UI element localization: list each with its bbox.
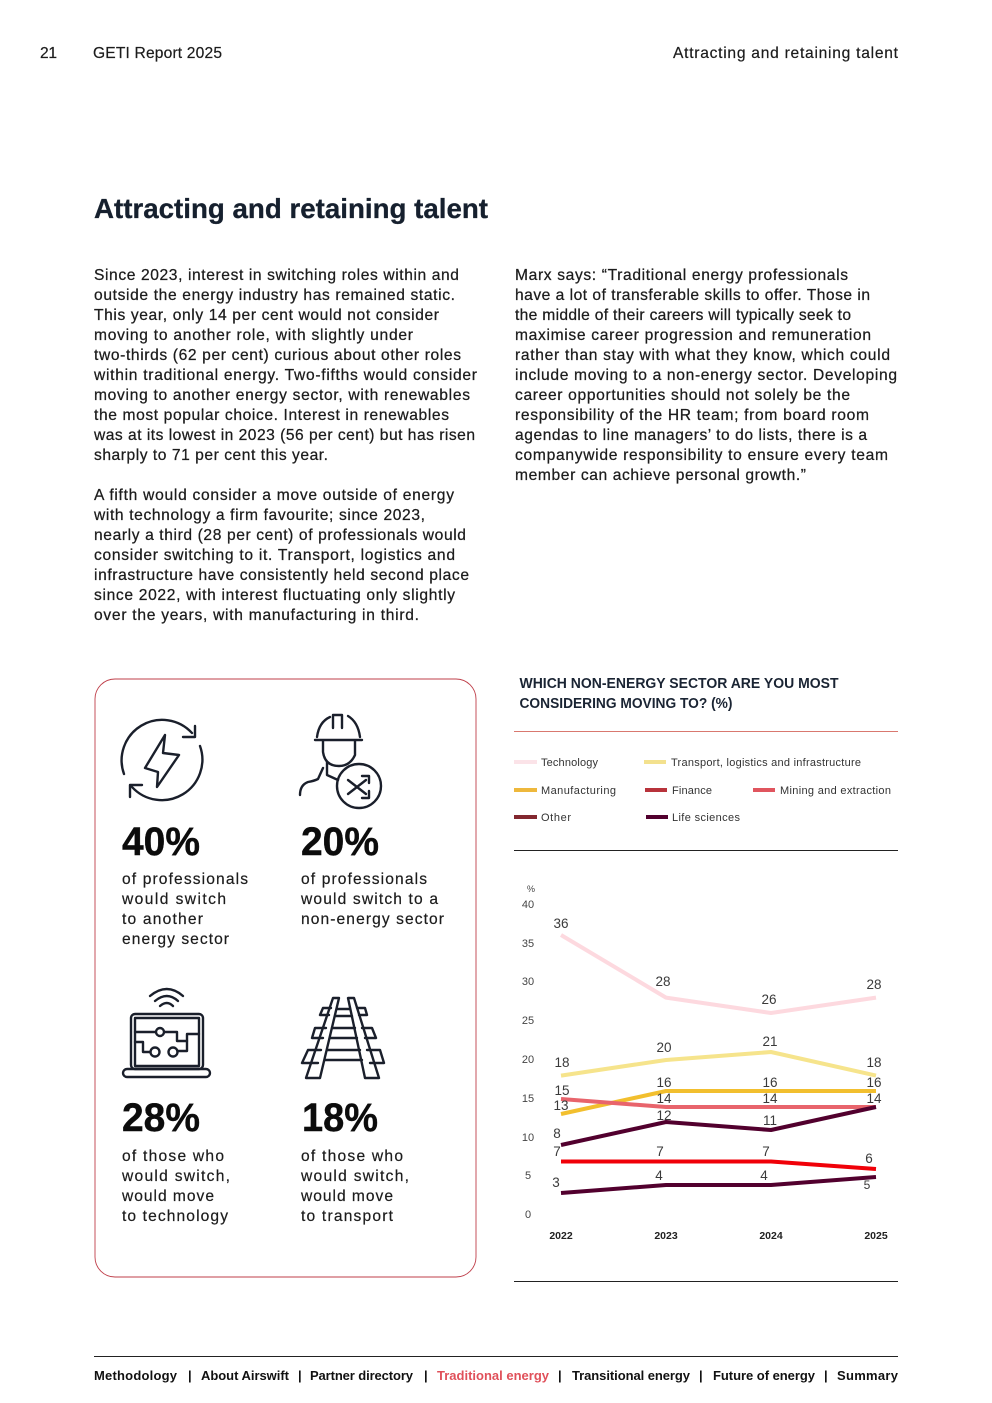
- text block: right column quote: maximise career progression and remuneration: [515, 327, 871, 344]
- stat: 28 per cent: would switch,: [121, 1168, 230, 1185]
- series: manufacturing: [561, 1091, 876, 1114]
- footer navigation: |: [699, 1368, 703, 1383]
- page header: GETI Report 2025: [93, 45, 222, 62]
- text block: left column: consider switching to it. Transport, logistics and: [94, 547, 455, 564]
- text block: right column quote: Marx says: “Traditional energy professionals: [515, 267, 848, 284]
- text block: left column: [93, 267, 477, 624]
- chart heading: CONSIDERING MOVING TO? (%): [520, 696, 733, 712]
- data labels: 7: [762, 1144, 770, 1159]
- text block: right column quote: rather than stay with what they know, which could: [515, 347, 890, 364]
- text block: left column: Since 2023, interest in switching roles within and: [94, 267, 459, 284]
- footer navigation: Methodology: [94, 1368, 178, 1383]
- data labels: 18: [866, 1055, 882, 1070]
- stat: 40 per cent: to another: [122, 911, 203, 928]
- stat: 18 per cent: 18%: [302, 1096, 378, 1140]
- data labels: [552, 916, 882, 1192]
- text block: left column: with technology a firm favourite; since 2023,: [93, 507, 425, 524]
- footer navigation: Future of energy: [713, 1368, 816, 1383]
- data labels: 15: [554, 1083, 570, 1098]
- y axis labels: %: [527, 884, 535, 894]
- text block: left column: since 2022, with interest fluctuating only slightly: [94, 587, 455, 604]
- text block: right column quote: career opportunities should not solely be the: [515, 387, 850, 404]
- text block: left column: A fifth would consider a move outside of energy: [94, 487, 454, 504]
- y axis labels: 20: [522, 1054, 534, 1066]
- footer navigation: Partner directory: [310, 1368, 414, 1383]
- y axis labels: 30: [522, 976, 534, 988]
- line chart: [522, 884, 888, 1242]
- footer navigation: |: [424, 1368, 428, 1383]
- data labels: 12: [656, 1108, 672, 1123]
- y axis labels: 0: [525, 1209, 531, 1221]
- text block: right column quote: responsibility of the HR team; from board room: [515, 407, 869, 424]
- footer navigation: Summary: [837, 1368, 899, 1383]
- data labels: 3: [552, 1175, 560, 1190]
- stat: 28 per cent: [121, 1096, 230, 1225]
- data labels: 6: [865, 1151, 873, 1166]
- stat: 20 per cent: [300, 820, 444, 928]
- y axis labels: 25: [522, 1015, 534, 1027]
- x axis labels: [549, 1230, 888, 1242]
- chart legend: Other: [541, 812, 571, 824]
- footer navigation: |: [558, 1368, 562, 1383]
- chart legend: Transport, logistics and infrastructure: [671, 757, 861, 769]
- y axis labels: 5: [525, 1170, 531, 1182]
- stat: 18 per cent: would move: [300, 1188, 393, 1205]
- data labels: 18: [554, 1055, 570, 1070]
- stat: 40 per cent: of professionals: [122, 871, 248, 888]
- data labels: 4: [655, 1168, 663, 1183]
- series: mining and extraction: [561, 1099, 876, 1107]
- y axis labels: 40: [522, 899, 534, 911]
- data labels: 13: [553, 1098, 569, 1113]
- footer navigation: |: [824, 1368, 828, 1383]
- stat: 20 per cent: of professionals: [301, 871, 427, 888]
- text block: right column quote: have a lot of transferable skills to offer. Those in: [515, 287, 870, 304]
- data labels: 16: [866, 1075, 882, 1090]
- data labels: 5: [864, 1178, 871, 1192]
- data labels: 7: [553, 1144, 561, 1159]
- chart legend: Mining and extraction: [780, 785, 891, 797]
- data labels: 16: [762, 1075, 778, 1090]
- text block: left column: infrastructure have consistently held second place: [94, 567, 469, 584]
- chart legend: Manufacturing: [541, 785, 616, 797]
- text block: left column: the most popular choice. Interest in renewables: [94, 407, 449, 424]
- series: technology: [561, 935, 876, 1013]
- series: finance: [561, 1162, 876, 1169]
- data labels: 28: [866, 977, 882, 992]
- text block: right column quote: [515, 267, 897, 484]
- data labels: 4: [760, 1168, 768, 1183]
- stat: 18 per cent: to transport: [301, 1208, 394, 1225]
- stat: 28 per cent: 28%: [122, 1096, 200, 1140]
- icon: worker switching: [300, 715, 381, 808]
- icon: railway track: [302, 998, 384, 1078]
- data labels: 36: [553, 916, 569, 931]
- text block: left column: outside the energy industry has remained static.: [94, 287, 455, 304]
- data labels: 16: [656, 1075, 672, 1090]
- text block: right column quote: companywide responsibility to ensure every team: [515, 447, 888, 464]
- page header: [40, 45, 899, 62]
- text block: left column: moving to another role, with slightly under: [94, 327, 413, 344]
- text block: right column quote: member can achieve personal growth.”: [515, 467, 806, 484]
- stat: 28 per cent: of those who: [122, 1148, 224, 1165]
- y axis labels: 35: [522, 938, 534, 950]
- page header: 21: [40, 45, 57, 62]
- data labels: 8: [553, 1126, 561, 1141]
- stat: 18 per cent: [300, 1096, 409, 1225]
- text block: left column: This year, only 14 per cent would not consider: [94, 307, 439, 324]
- stat: 20 per cent: would switch to a: [300, 891, 438, 908]
- footer navigation: Transitional energy: [572, 1368, 691, 1383]
- panel: key statistics: [95, 679, 476, 1277]
- stat: 20 per cent: 20%: [301, 820, 379, 864]
- footer navigation: |: [298, 1368, 302, 1383]
- chart legend: Life sciences: [672, 812, 740, 824]
- chart heading: [520, 676, 839, 712]
- title: Attracting and retaining talent: [94, 193, 488, 224]
- series: life sciences upper: [561, 1107, 876, 1145]
- text block: left column: two-thirds (62 per cent) curious about other roles: [94, 347, 461, 364]
- data labels: 14: [762, 1091, 778, 1106]
- y axis labels: 15: [522, 1093, 534, 1105]
- footer navigation: |: [188, 1368, 192, 1383]
- stat: 20 per cent: non-energy sector: [301, 911, 444, 928]
- chart legend: [514, 757, 891, 824]
- text block: right column quote: include moving to a non-energy sector. Developing: [515, 367, 897, 384]
- footer navigation: About Airswift: [201, 1368, 290, 1383]
- x axis labels: 2025: [864, 1230, 888, 1242]
- stat: 40 per cent: energy sector: [122, 931, 229, 948]
- stat: 40 per cent: would switch: [121, 891, 226, 908]
- chart legend: Finance: [672, 785, 712, 797]
- text block: left column: nearly a third (28 per cent) of professionals would: [94, 527, 466, 544]
- text block: right column quote: the middle of their careers will typically seek to: [515, 307, 851, 324]
- icon: energy cycle: [122, 720, 202, 800]
- data labels: 21: [762, 1034, 778, 1049]
- text block: left column: moving to another energy sector, with renewables: [94, 387, 470, 404]
- data labels: 7: [656, 1144, 664, 1159]
- data labels: 20: [656, 1040, 672, 1055]
- x axis labels: 2023: [654, 1230, 678, 1242]
- stat: 18 per cent: would switch,: [300, 1168, 409, 1185]
- data labels: 14: [866, 1091, 882, 1106]
- data labels: 14: [656, 1091, 672, 1106]
- icon: laptop with circuit and wifi: [123, 989, 210, 1077]
- series: other: [561, 1177, 876, 1193]
- stat: 28 per cent: would move: [121, 1188, 214, 1205]
- text block: left column: sharply to 71 per cent this year.: [94, 447, 328, 464]
- footer navigation: [94, 1368, 899, 1383]
- y axis labels: 10: [522, 1132, 534, 1144]
- series: transport: [561, 1052, 876, 1076]
- stat: 40 per cent: [121, 820, 248, 948]
- data labels: 26: [761, 992, 777, 1007]
- stat: 28 per cent: to technology: [122, 1208, 228, 1225]
- chart legend: Technology: [541, 757, 598, 769]
- x axis labels: 2024: [759, 1230, 783, 1242]
- x axis labels: 2022: [549, 1230, 573, 1242]
- chart heading: WHICH NON-ENERGY SECTOR ARE YOU MOST: [520, 676, 839, 692]
- text block: right column quote: agendas to line managers’ to do lists, there is a: [515, 427, 867, 444]
- text block: left column: within traditional energy. Two-fifths would consider: [93, 367, 477, 384]
- stat: 18 per cent: of those who: [301, 1148, 403, 1165]
- page header: Attracting and retaining talent: [673, 45, 899, 62]
- stat: 40 per cent: 40%: [122, 820, 200, 864]
- text block: left column: over the years, with manufacturing in third.: [94, 607, 419, 624]
- data labels: 11: [763, 1113, 777, 1128]
- text block: left column: was at its lowest in 2023 (56 per cent) but has risen: [93, 427, 475, 444]
- data labels: 28: [655, 974, 671, 989]
- y axis labels: [522, 884, 535, 1221]
- footer navigation: Traditional energy: [437, 1368, 550, 1383]
